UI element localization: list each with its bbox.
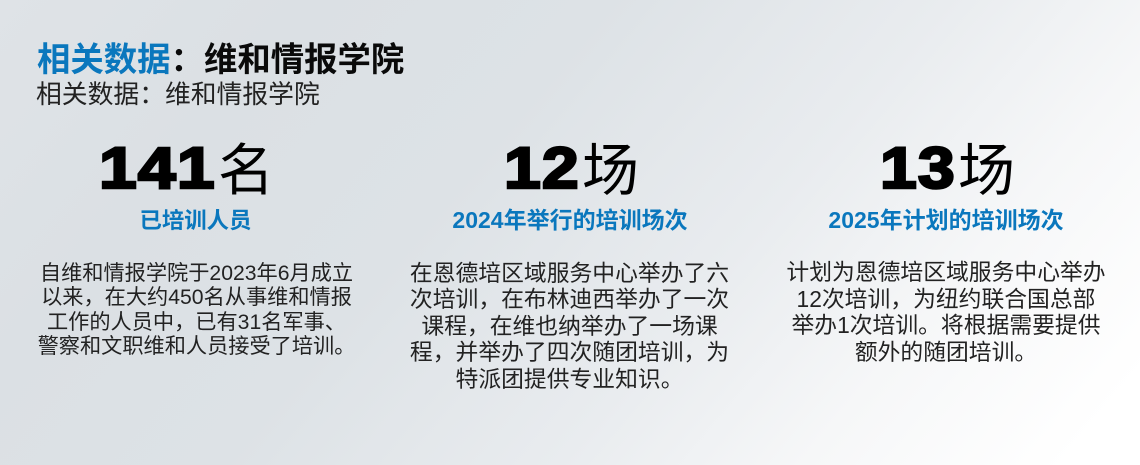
subtitle: 相关数据：维和情报学院 [36, 81, 320, 109]
text block: column 1: 警察和文职维和人员接受了培训。 [38, 335, 355, 358]
text block: column 1 [38, 262, 355, 358]
text block: column 3: 计划为恩德培区域服务中心举办 [786, 259, 1106, 285]
stat number: 13 sessions: 13 [880, 136, 956, 201]
stat label: trained personnel: 已培训人员 [140, 208, 251, 233]
stat label: 2025 planned sessions: 2025年计划的培训场次 [828, 207, 1064, 233]
text block: column 1: 工作的人员中，已有31名军事、 [47, 310, 346, 334]
stat number: 13 sessions: 场 [958, 139, 1015, 203]
text block: column 1: 以来，在大约450名从事维和情报 [41, 286, 352, 309]
text block: column 2: 程，并举办了四次随团培训，为 [410, 339, 729, 365]
text block: column 3 [786, 259, 1106, 364]
text block: column 1: 自维和情报学院于2023年6月成立 [40, 262, 353, 284]
text block: column 2: 特派团提供专业知识。 [456, 366, 683, 392]
text block: column 2: 次培训，在布林迪西举办了一次 [410, 286, 729, 312]
stat number: 141 trainees: 141 [99, 136, 216, 201]
title: 相关数据：维和情报学院 [37, 42, 404, 79]
stat number: 141 trainees [99, 136, 274, 202]
text block: column 2 [410, 260, 729, 392]
stat number: 12 sessions: 场 [582, 139, 639, 203]
text block: column 2: 课程，在维也纳举办了一场课 [421, 312, 718, 338]
text block: column 3: 举办1次培训。将根据需要提供 [791, 312, 1101, 338]
stat number: 12 sessions [504, 136, 639, 203]
text block: column 3: 额外的随团培训。 [855, 338, 1037, 364]
stat number: 141 trainees: 名 [218, 139, 274, 202]
text block: column 2: 在恩德培区域服务中心举办了六 [410, 260, 729, 286]
stat number: 12 sessions: 12 [504, 136, 580, 201]
text block: column 3: 12次培训，为纽约联合国总部 [797, 286, 1095, 312]
stat label: 2024 sessions: 2024年举行的培训场次 [452, 207, 688, 233]
stat number: 13 sessions [880, 136, 1015, 203]
